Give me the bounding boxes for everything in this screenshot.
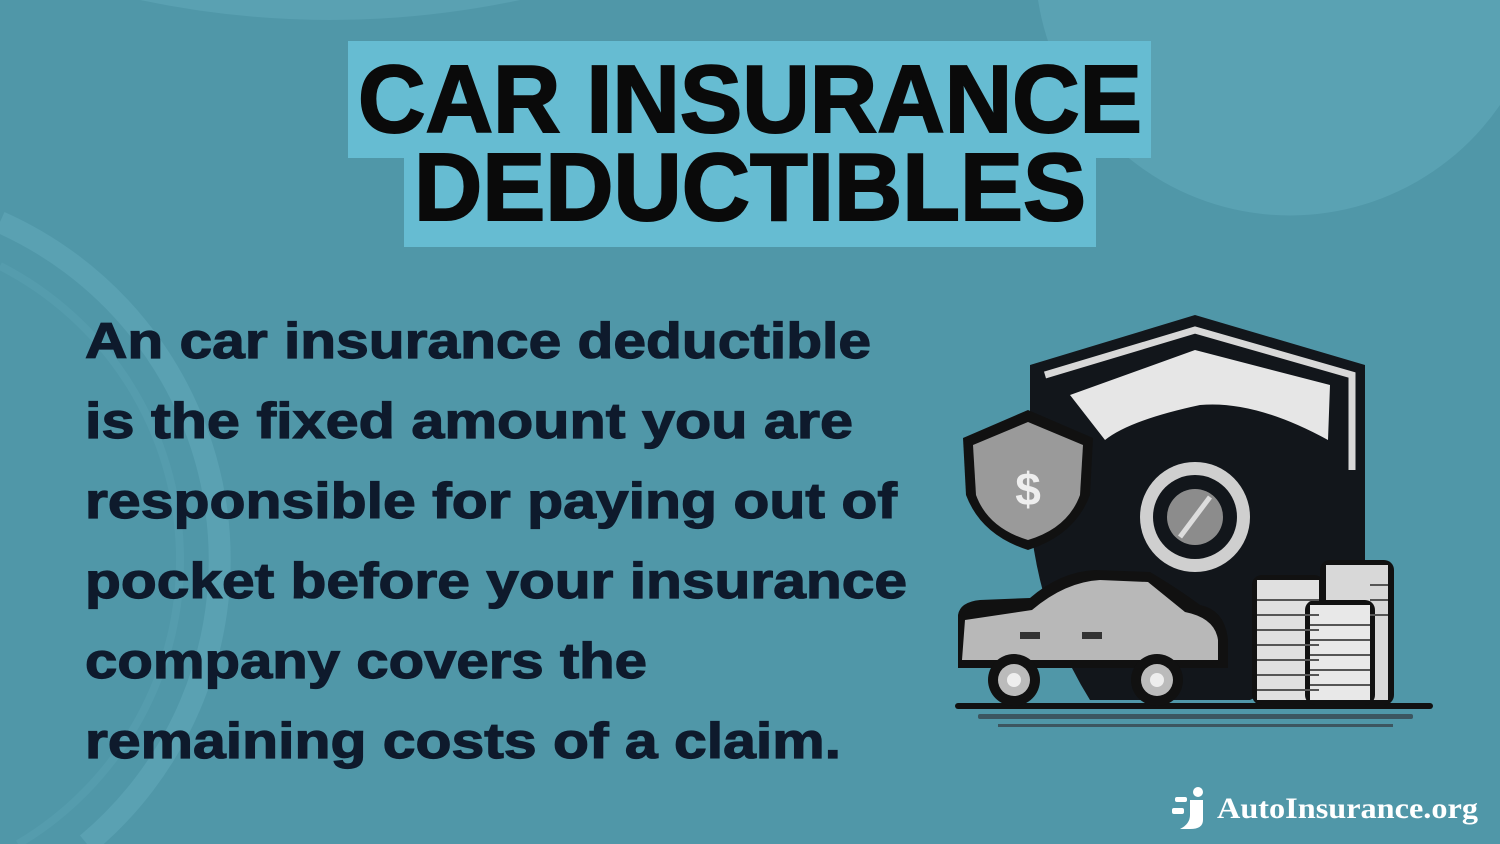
logo [1172,787,1478,829]
ground lines [955,703,1433,727]
title [348,41,1151,247]
coin stacks [1252,560,1394,705]
small shield with dollar [963,410,1093,550]
icon: logo mark [1172,787,1203,829]
small shield with dollar: $ [1015,463,1041,515]
text block: definition [85,313,907,769]
car [958,570,1228,706]
text block: definition: pocket before your insurance [85,553,907,609]
big shield [1030,315,1365,700]
text block: definition: remaining costs of a claim. [85,713,841,769]
logo: AutoInsurance.org [1217,792,1478,825]
text block: definition: responsible for paying out of [85,473,897,529]
text block: definition: An car insurance deductible [85,313,871,369]
title: CAR INSURANCE [358,46,1142,153]
text block: definition: company covers the [85,633,647,689]
icon: insurance illustration [955,315,1433,727]
title: DEDUCTIBLES [414,134,1086,241]
text block: definition: is the fixed amount you are [85,393,853,449]
